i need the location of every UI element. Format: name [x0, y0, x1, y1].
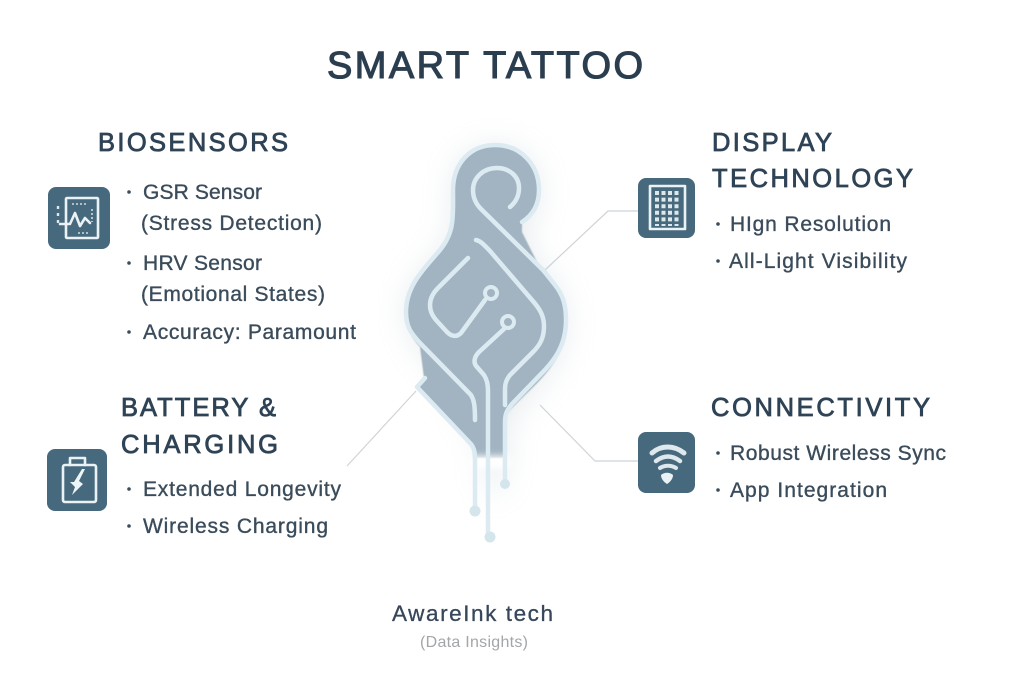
circuit node rings: [485, 287, 514, 328]
list: display: All-Light Visibility: [729, 250, 908, 273]
icon: wifi: [638, 432, 695, 493]
list: connectivity: Robust Wireless Sync: [730, 442, 946, 465]
inner circuit traces: [430, 168, 545, 537]
list: biosensors: HRV Sensor: [143, 252, 262, 275]
connector: connectivity: [540, 405, 638, 461]
list: biosensors: Accuracy: Paramount: [143, 321, 356, 344]
central smart tattoo illustration: [405, 145, 567, 542]
heading: battery and charging: [121, 394, 278, 459]
footer note: (Data Insights): [420, 634, 528, 651]
heading: display technology: [712, 129, 913, 193]
heading: battery and charging: BATTERY &: [121, 394, 276, 422]
list: connectivity: App Integration: [730, 479, 887, 502]
list: biosensors: GSR Sensor: [143, 181, 262, 204]
tattoo body fill: [406, 145, 566, 458]
heading: battery and charging: CHARGING: [121, 431, 278, 459]
icon: battery: [47, 449, 107, 511]
heading: biosensors: BIOSENSORS: [98, 129, 288, 157]
connector: battery: [347, 391, 416, 466]
trace end dots: [470, 479, 510, 542]
list: battery: [127, 478, 342, 538]
list: battery: Extended Longevity: [143, 478, 342, 501]
list: biosensors: [127, 181, 356, 344]
heading: display technology: DISPLAY: [712, 129, 832, 157]
list: battery: Wireless Charging: [143, 515, 328, 538]
list: display: [716, 213, 908, 273]
list: biosensors: (Emotional States): [141, 283, 325, 306]
footer brand: AwareInk tech: [392, 601, 553, 626]
outline traces: [406, 145, 566, 510]
icon: display grid: [638, 178, 695, 238]
lower fade: [470, 456, 510, 468]
list: display: HIgn Resolution: [730, 213, 891, 236]
heading: display technology: TECHNOLOGY: [712, 165, 913, 193]
icon: biosensor chart: [48, 187, 110, 249]
list: connectivity: [716, 442, 946, 502]
title: SMART TATTOO: [327, 45, 643, 87]
soft glow: [405, 146, 567, 500]
heading: connectivity: CONNECTIVITY: [711, 394, 930, 422]
list: biosensors: (Stress Detection): [141, 212, 322, 235]
connector: display icon: [545, 211, 638, 270]
